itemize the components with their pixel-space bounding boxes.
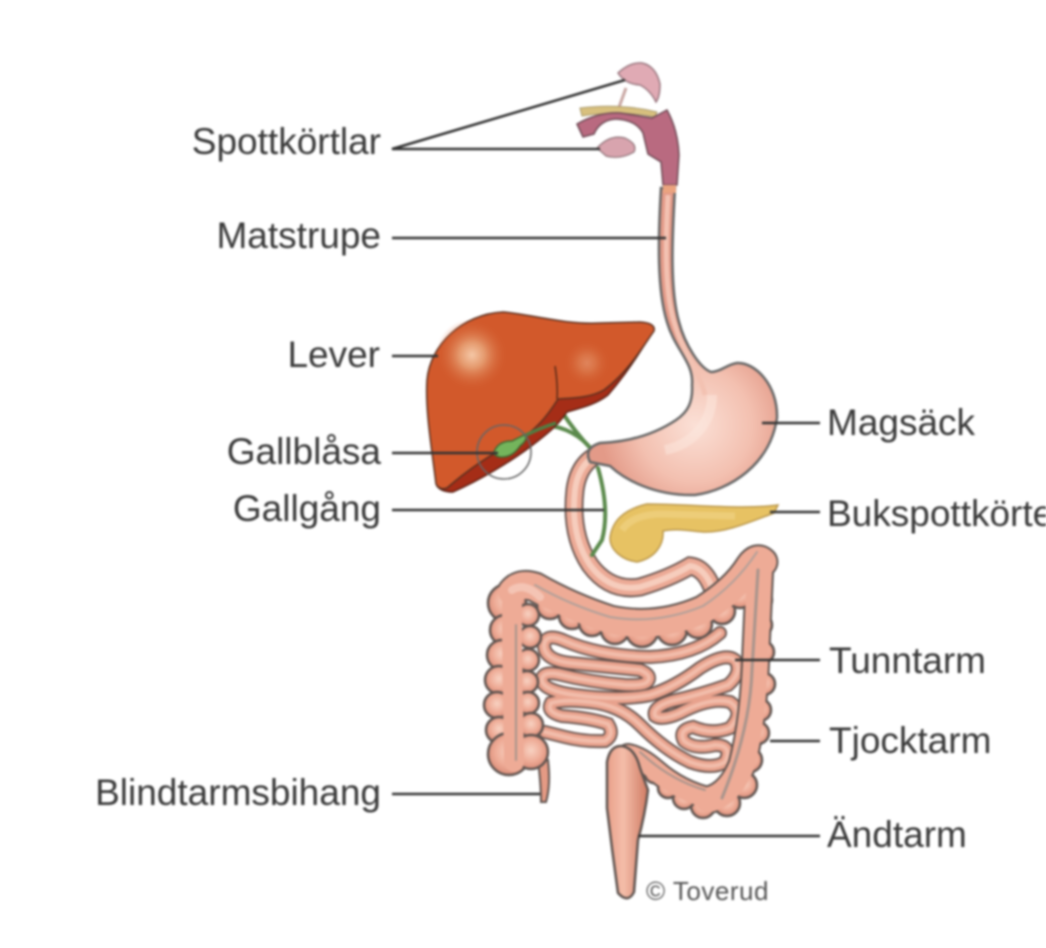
copyright credit: © Toverud (646, 876, 769, 906)
label: Gallgång: Gallgång (233, 488, 381, 529)
esophagus highlight (666, 195, 705, 395)
esophagus top (663, 185, 676, 193)
duodenum (574, 450, 716, 600)
colon band (512, 552, 763, 800)
cystic duct (524, 423, 556, 436)
label: Blindtarmsbihang: Blindtarmsbihang (95, 772, 381, 813)
sublingual gland (597, 137, 635, 157)
small intestine (542, 633, 738, 766)
ascending colon lumps (484, 584, 548, 775)
colon haustra (484, 582, 775, 818)
label: Spottkörtlar (192, 80, 625, 162)
esophagus and stomach (588, 188, 777, 495)
rectum (607, 746, 648, 898)
liver highlight left (436, 319, 508, 391)
bile duct (545, 412, 605, 555)
label: Magsäck: Magsäck (827, 402, 976, 443)
descending colon lumps (645, 588, 775, 818)
label: Gallblåsa: Gallblåsa (227, 431, 381, 472)
label: Matstrupe: Matstrupe (216, 215, 381, 256)
appendix (538, 760, 549, 802)
pancreas (610, 504, 778, 562)
colon outline underlay (512, 560, 763, 800)
label: Tjocktarm: Tjocktarm (829, 720, 991, 761)
liver underside (437, 331, 653, 492)
gallbladder (494, 434, 526, 457)
label: Tunntarm: Tunntarm (829, 640, 986, 681)
transverse colon lumps (537, 582, 753, 647)
label: Lever: Lever (287, 334, 380, 375)
palate (580, 106, 657, 117)
pharynx (577, 110, 679, 185)
label: Spottkörtlar: Spottkörtlar (192, 121, 381, 162)
parotid gland (618, 63, 660, 102)
parotid duct (618, 88, 626, 110)
liver (427, 312, 654, 489)
liver fissure (555, 366, 557, 399)
stomach highlight (665, 395, 712, 450)
liver highlight right (563, 339, 611, 387)
pancreas highlight (622, 514, 735, 530)
label: Ändtarm: Ändtarm (827, 814, 967, 855)
gallbladder circle (477, 425, 531, 479)
oral cavity and pharynx (577, 63, 679, 193)
